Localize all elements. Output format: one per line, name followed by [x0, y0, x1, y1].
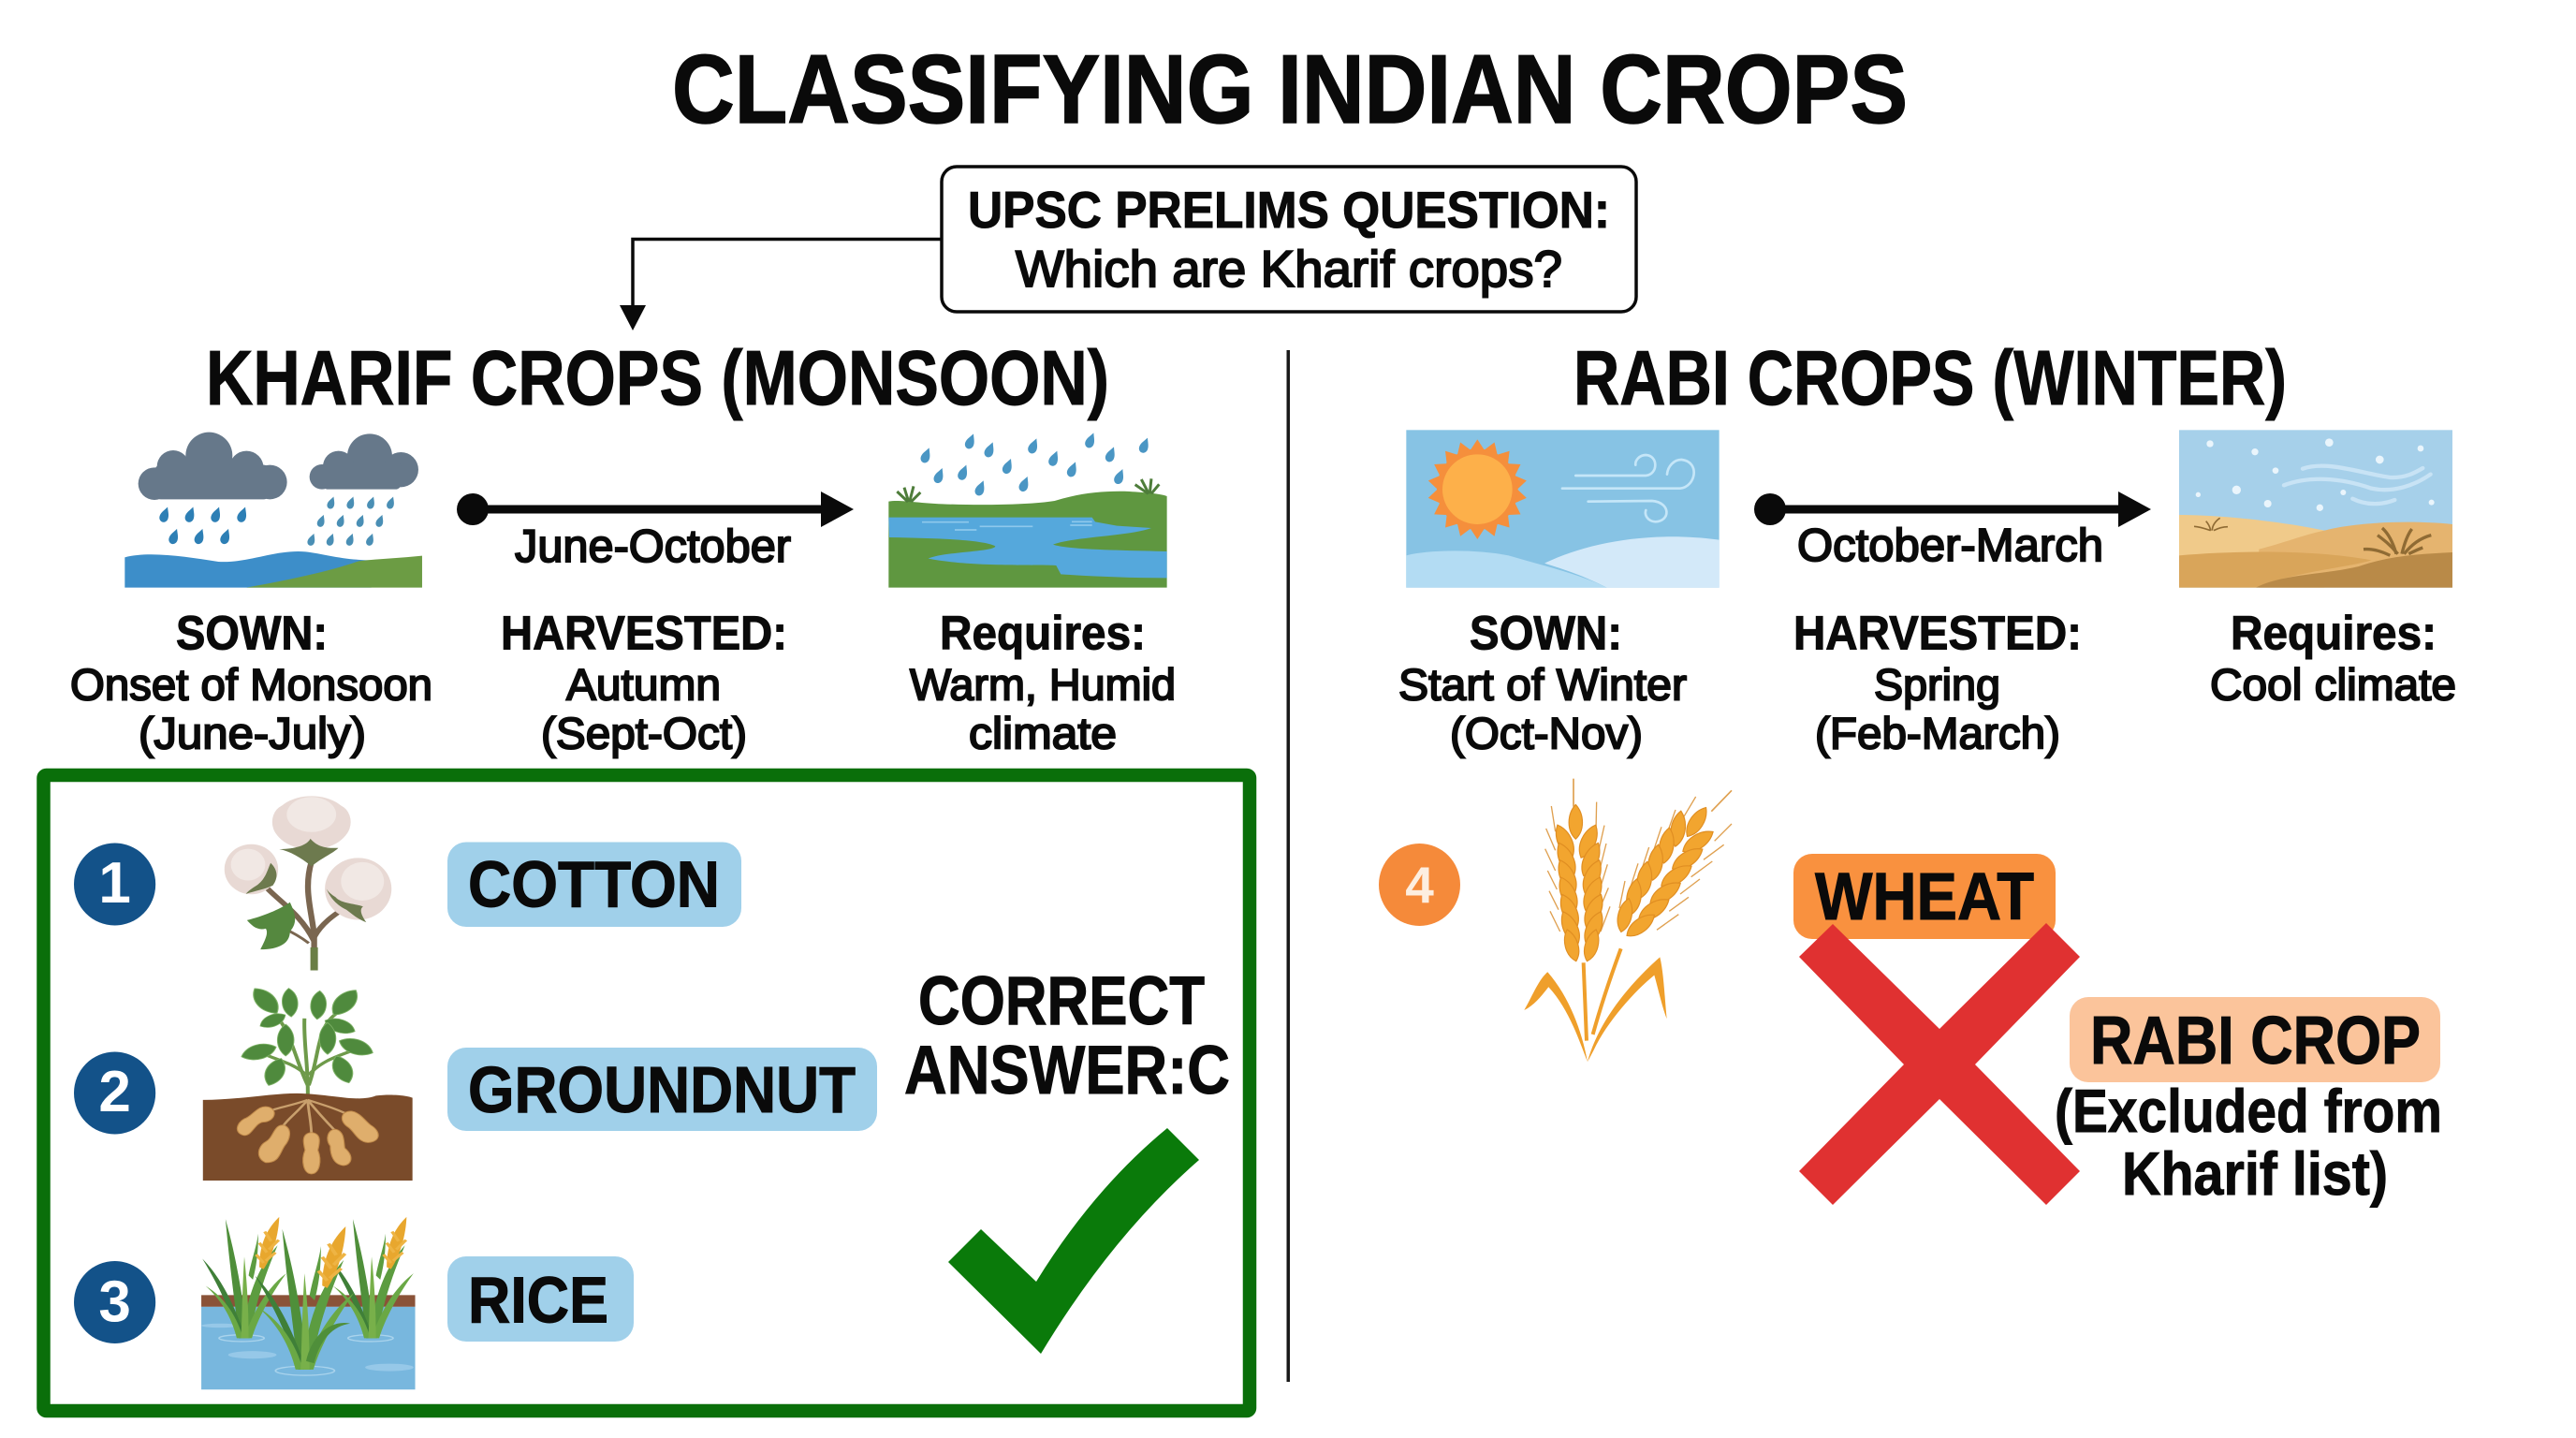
- question box: UPSC PRELIMS QUESTION:: [968, 181, 1610, 239]
- text: kharif sown: [70, 607, 432, 758]
- arrow: October-March: [1754, 492, 2151, 571]
- label: groundnut: GROUNDNUT: [468, 1053, 856, 1126]
- text: kharif harvested: [501, 607, 787, 758]
- text: kharif requires: climate: [969, 708, 1117, 758]
- question box: [942, 167, 1636, 312]
- text: kharif requires: [910, 607, 1176, 758]
- badge: 4: [1379, 844, 1460, 926]
- center divider: [1286, 350, 1290, 1382]
- text: rabi harvested: [1793, 607, 2082, 758]
- icon: winter sun and wind: [1406, 430, 1720, 588]
- text: kharif harvested: (Sept-Oct): [541, 708, 747, 758]
- arrow: June-October: [457, 492, 854, 572]
- heading: kharif: KHARIF CROPS (MONSOON): [206, 334, 1109, 421]
- text: rabi harvested: HARVESTED:: [1793, 607, 2082, 659]
- text: rabi harvested: (Feb-March): [1815, 708, 2060, 758]
- icon: cotton plant: [225, 796, 391, 971]
- text: kharif requires: Requires:: [940, 607, 1146, 659]
- icon: green check mark: [948, 1128, 1199, 1354]
- badge: 3: 3: [98, 1269, 131, 1335]
- icon: rice plants in water: [201, 1217, 416, 1389]
- label: rabi crop: RABI CROP: [2090, 1004, 2421, 1078]
- text: kharif sown: (June-July): [139, 708, 366, 758]
- icon: red cross: [1799, 923, 2080, 1205]
- text: excluded from kharif list: (Excluded from: [2055, 1077, 2442, 1145]
- text: rabi sown: Start of Winter: [1398, 659, 1687, 710]
- panel: correct answer box: [43, 775, 1250, 1411]
- icon: wheat: [1524, 779, 1732, 1062]
- text: rabi sown: (Oct-Nov): [1450, 708, 1643, 758]
- title: CLASSIFYING INDIAN CROPS: [672, 36, 1908, 144]
- heading: rabi: RABI CROPS (WINTER): [1573, 334, 2287, 421]
- label: cotton: COTTON: [468, 848, 720, 921]
- text: correct answer: ANSWER:C: [904, 1033, 1230, 1108]
- icon: flooded field with rain: [888, 432, 1167, 588]
- text: rabi sown: [1398, 607, 1687, 758]
- text: rabi sown: SOWN:: [1470, 607, 1622, 659]
- text: excluded from kharif list: Kharif list): [2122, 1139, 2388, 1208]
- icon: cool dry landscape: [2179, 430, 2452, 588]
- text: kharif harvested: Autumn: [566, 659, 721, 710]
- arrow: October-March: October-March: [1797, 521, 2103, 571]
- text: kharif requires: Warm, Humid: [910, 659, 1176, 710]
- icon: groundnut plant: [203, 984, 413, 1181]
- arrow: June-October: June-October: [515, 521, 791, 572]
- text: kharif sown: SOWN:: [176, 607, 328, 659]
- arrow: question to kharif: [620, 240, 942, 330]
- badge: 4: 4: [1405, 856, 1434, 914]
- text: rabi requires: Cool climate: [2210, 659, 2456, 710]
- text: kharif harvested: HARVESTED:: [501, 607, 787, 659]
- text: correct answer: [904, 963, 1230, 1108]
- badge: 3: [74, 1261, 155, 1343]
- text: kharif sown: Onset of Monsoon: [70, 659, 432, 710]
- icon: monsoon clouds and rain: [124, 433, 422, 588]
- text: excluded from kharif list: [2055, 1077, 2442, 1208]
- text: rabi harvested: Spring: [1874, 659, 2000, 710]
- badge: 1: [74, 843, 155, 925]
- badge: 2: 2: [98, 1060, 131, 1124]
- question box: Which are Kharif crops?: [1016, 240, 1562, 298]
- badge: 1: 1: [98, 851, 131, 916]
- badge: 2: [74, 1052, 155, 1135]
- label: rice: RICE: [468, 1264, 608, 1337]
- text: rabi requires: [2210, 607, 2456, 710]
- text: rabi requires: Requires:: [2231, 607, 2437, 659]
- label: wheat: WHEAT: [1815, 860, 2034, 934]
- text: correct answer: CORRECT: [918, 963, 1205, 1039]
